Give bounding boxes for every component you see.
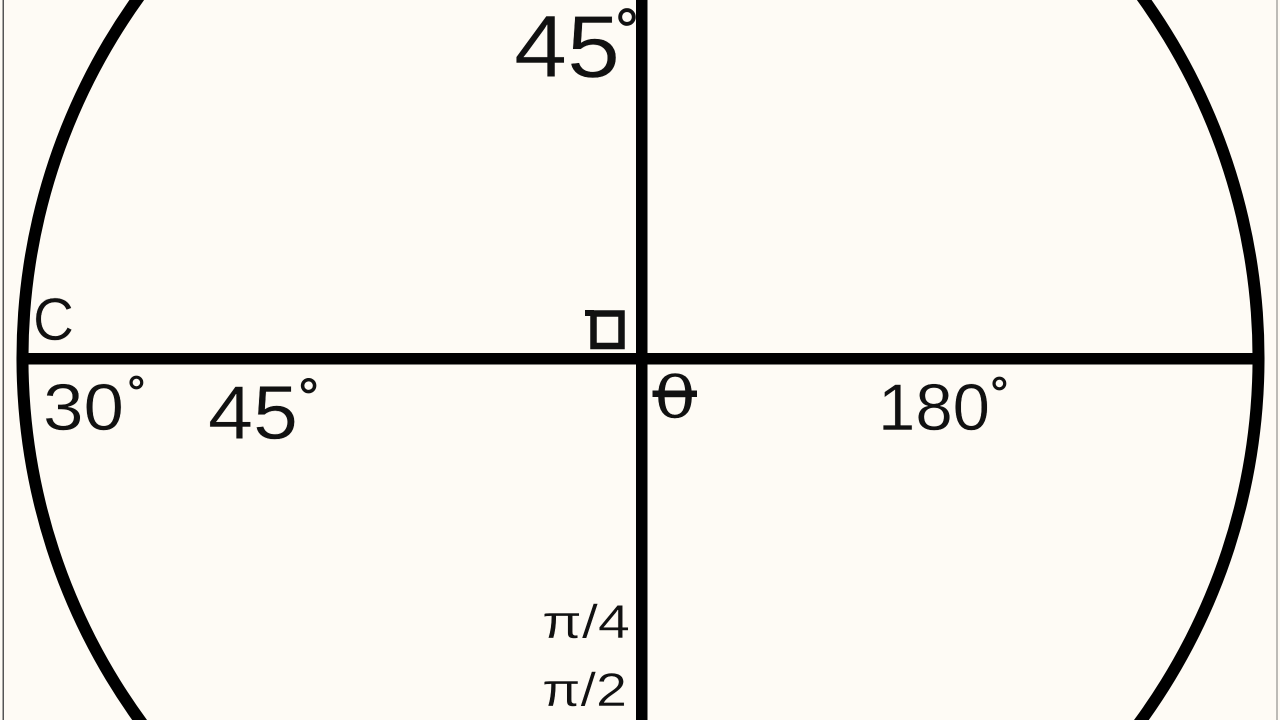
label: 45 degrees left: ° <box>298 368 319 427</box>
label: 180 degrees: 180 <box>878 370 990 444</box>
label: C: C <box>33 286 74 353</box>
label: pi over 4: π/4 <box>542 595 630 648</box>
label: 30 degrees: 30 <box>43 370 124 444</box>
label: pi over 2: π/2 <box>542 663 627 716</box>
label: 30 degrees <box>43 366 146 444</box>
label: 180 degrees: ° <box>990 367 1009 420</box>
vertical axis <box>636 0 648 720</box>
label: theta: θ <box>654 363 696 432</box>
horizontal axis <box>21 353 1260 364</box>
label: 30 degrees: ° <box>127 366 146 419</box>
right angle marker <box>585 310 622 346</box>
label: 45 degrees left: 45 <box>208 371 298 456</box>
